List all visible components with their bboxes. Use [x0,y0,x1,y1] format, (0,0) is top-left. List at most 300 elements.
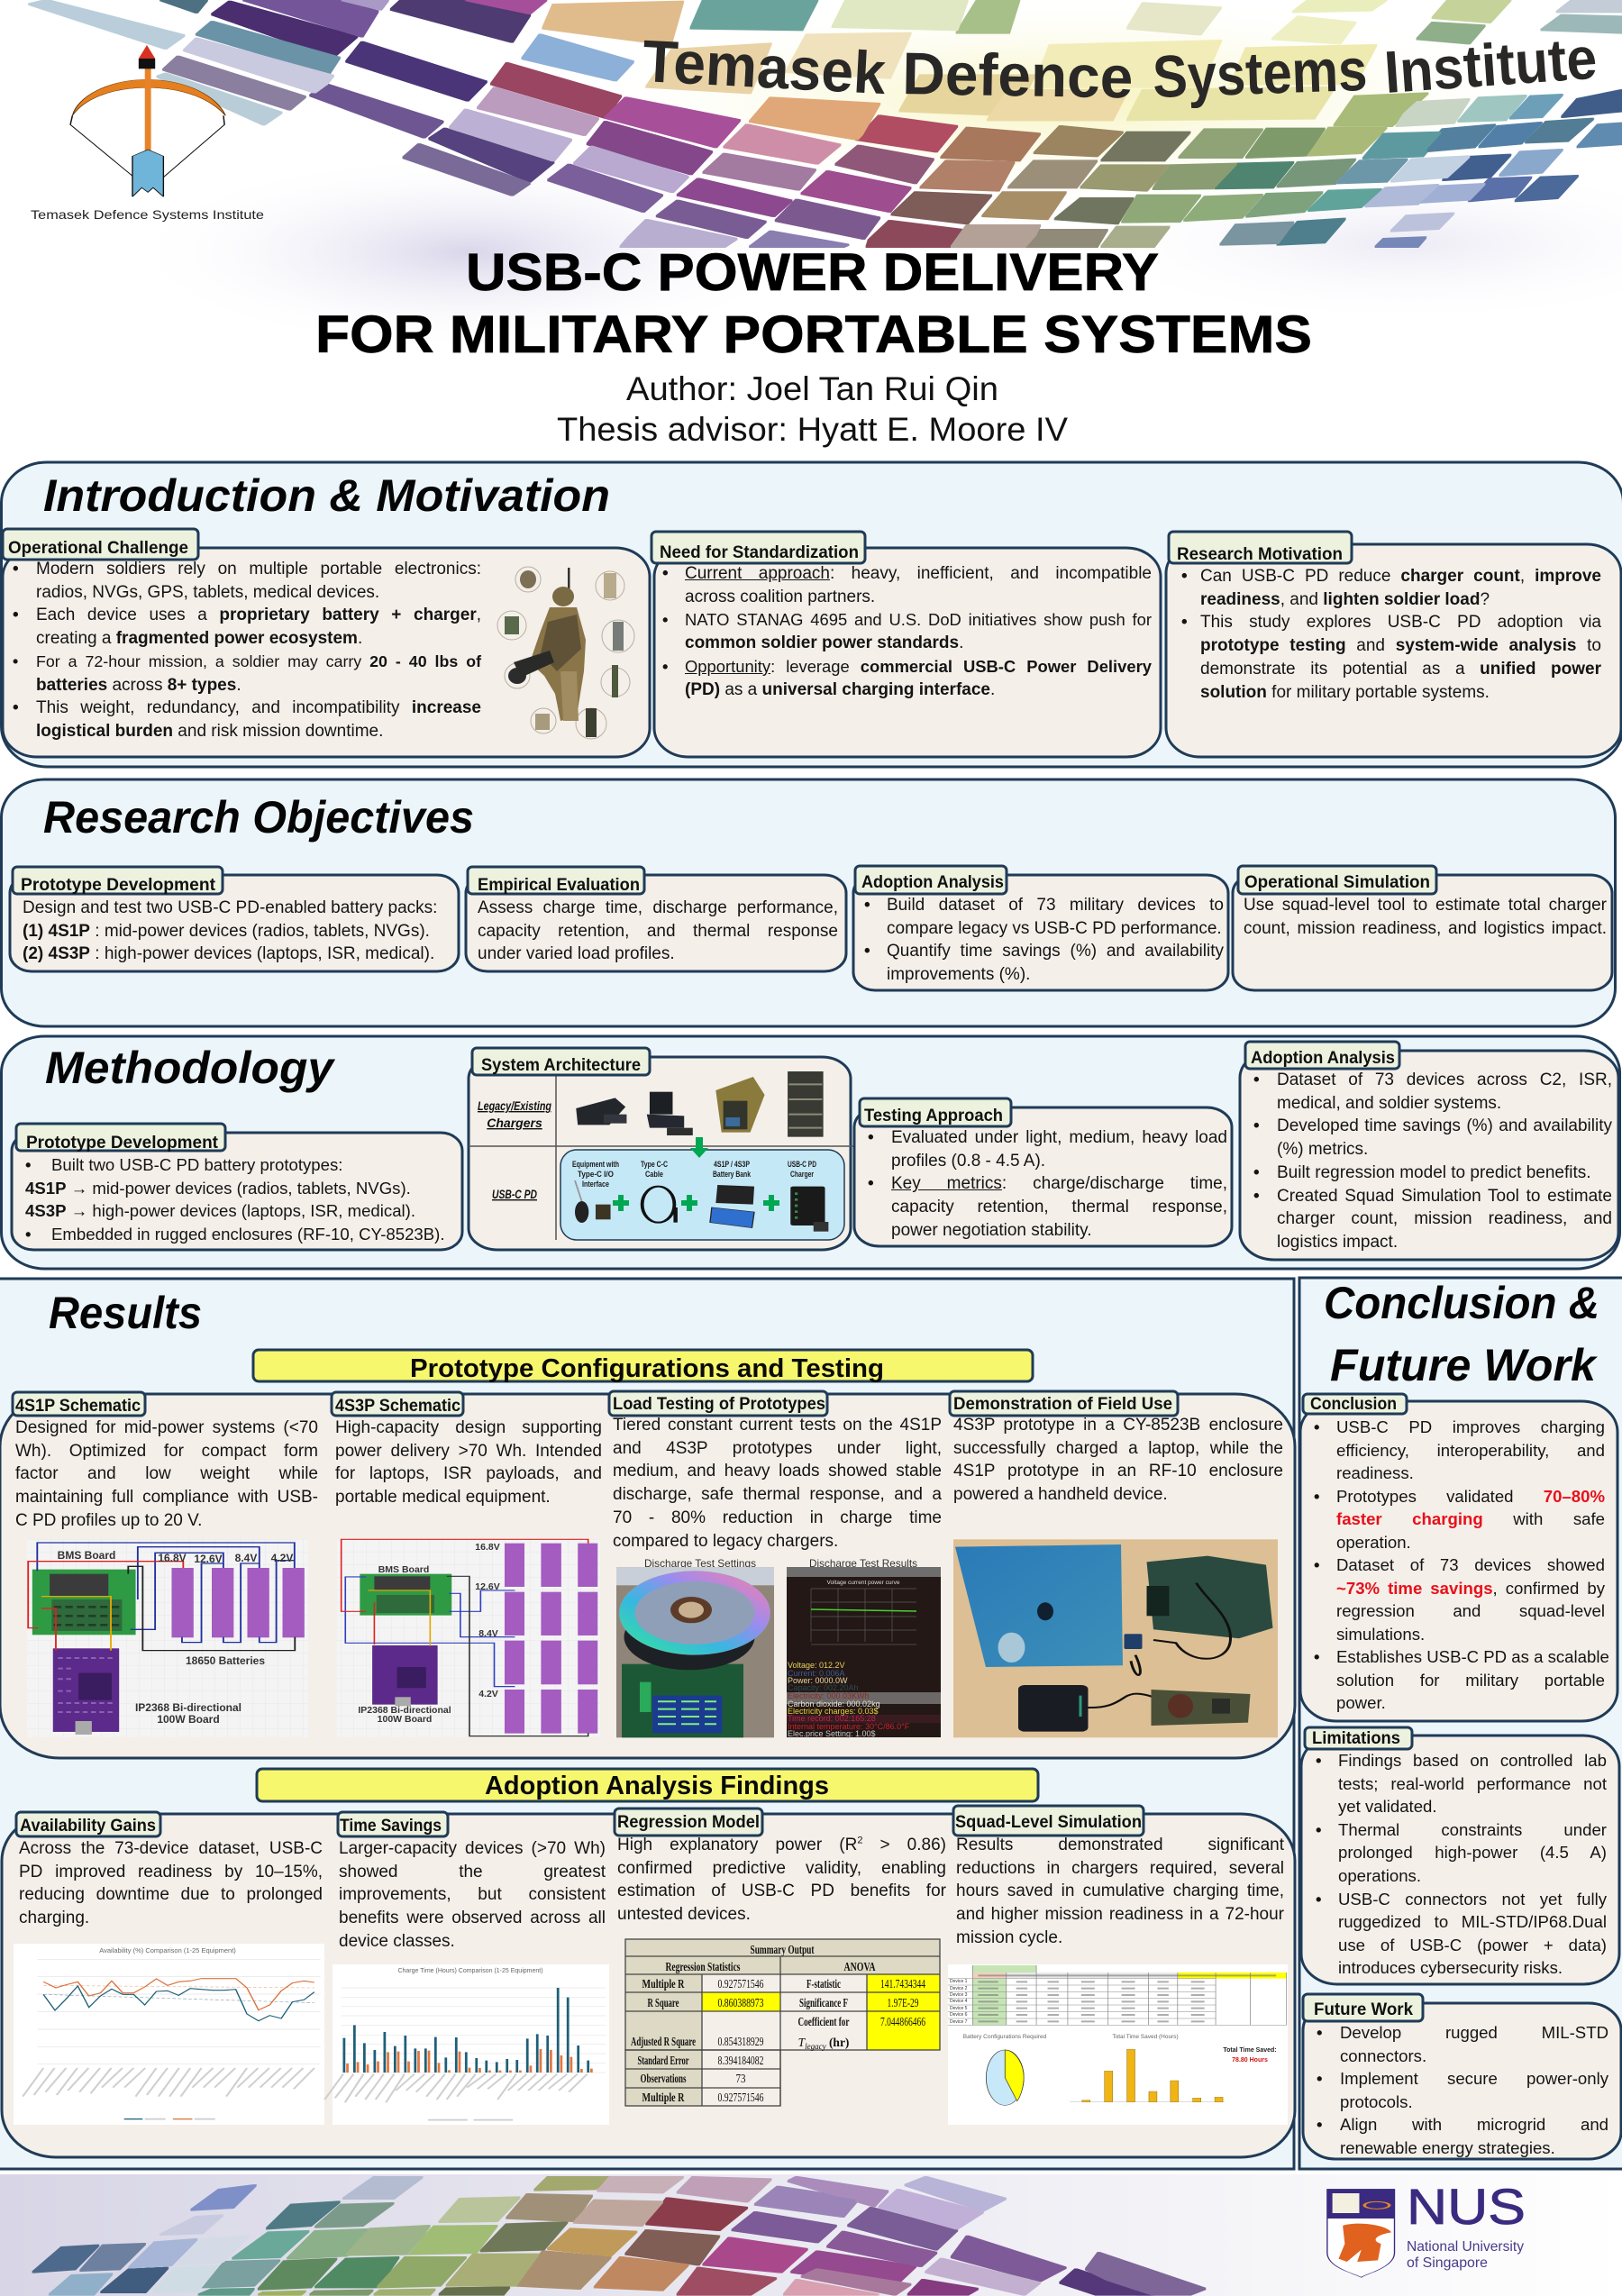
text: conclusion bullets: Establishes USB-C PD as a scalable [1336,1647,1609,1666]
heading: Results: Results [49,1288,202,1338]
mosaic: header colour tiles [29,0,1622,247]
table: regression summary output: Adjusted R Square [631,2035,696,2048]
text: adoption analysis bullets [1277,1069,1612,1254]
text: squad-level simulation: and higher mission readiness in a 72-hour [956,1905,1284,1924]
text: adoption analysis bullets: Developed time savings (%) and availability [1277,1116,1612,1135]
table: regression summary output: Standard Error [638,2054,688,2067]
text: 4S1P schematic description: Wh). Optimized for compact form [15,1442,318,1461]
image: discharge test results screen [787,1567,941,1738]
panel: Conclusion & Future Work [1299,1278,1622,2169]
icon: TDSI bow and arrow logo [70,45,225,196]
text: testing approach bullets: power negotiation stability. [891,1221,1092,1240]
tab: 4S1P Schematic: 4S1P Schematic [15,1396,141,1416]
text: empirical evaluation [478,897,838,967]
text: conclusion bullets: simulations. [1336,1624,1425,1644]
table: regression summary output: 0.927571546 [717,2091,764,2104]
tab: Operational Simulation: Operational Simulation [1244,872,1430,892]
text: adoption analysis objective [887,894,1224,988]
card: Testing Approach: • [868,1174,874,1193]
institute name: Temasek [641,27,888,106]
footer banner with mosaic and NUS logo [0,2174,1622,2296]
text: 4S1P schematic description: Designed for mid-power systems (<70 [15,1418,318,1437]
chart: availability comparison line chart: Availability (%) Comparison (1-25 Equipment) [99,1946,236,1954]
table: regression summary output: 8.394184082 [717,2054,764,2067]
image: squad simulation tool sheet: Total Time Saved (Hours) [1112,2034,1179,2040]
card: Conclusion: • [1314,1647,1320,1666]
tab: Squad-Level Simulation [953,1806,1144,1836]
image: squad simulation tool sheet: Device 3 [950,1992,968,1998]
text: operational challenge bullets: This weight, redundancy, and incompatibility increase [36,698,481,717]
text: empirical evaluation: capacity retention, and thermal response [478,922,838,941]
tab: Need for Standardization: Need for Standardization [660,542,859,562]
tab: Operational Simulation [1238,866,1436,894]
diagram: 4S1P schematic [27,1539,308,1737]
text: load testing description: Tiered constant current tests on the 4S1P [613,1416,942,1435]
card: Need for Standardization: • [662,657,668,676]
card: Conclusion: • [1314,1555,1320,1574]
table: regression summary output: 73 [735,2072,746,2085]
card: Prototype Development method [12,1124,462,1250]
diagram: 4S3P schematic: 8.4V [478,1628,498,1639]
card: Operational Challenge: • [13,698,19,717]
image: squad simulation tool sheet: 78.80 Hours [1232,2057,1268,2064]
card: Adoption Analysis objective [853,866,1228,990]
text: load testing description: medium, and heavy loads showed stable [613,1462,942,1481]
tab: Research Motivation: Research Motivation [1177,544,1343,564]
image: squad simulation tool sheet: Total Time Saved: [1223,2047,1277,2054]
card: Need for Standardization: • [662,564,669,583]
diagram: 4S1P schematic: BMS Board [58,1549,115,1562]
text: limitations bullets: Thermal constraints under [1338,1820,1607,1839]
text: regression model: confirmed predictive validity, enabling [617,1859,946,1878]
banner: Adoption Analysis Findings [257,1769,1038,1801]
chart: charge time comparison bar chart: Charge Time (Hours) Comparison (1-25 Equipment) [397,1968,543,1974]
text: field use description: successfully charged a laptop, while the [953,1439,1283,1458]
card: Limitations: • [1316,1890,1322,1909]
title: USB-C POWER DELIVERY [466,243,1159,302]
text: conclusion bullets: Prototypes validated 70–80% [1336,1487,1605,1505]
text: need for standardization bullets: common soldier power standards. [685,633,963,652]
text: operational simulation: Use squad-level tool to estimate total charger [1244,896,1607,915]
diagram: USB-C PD components: Cable [645,1170,663,1180]
text: limitations bullets: tests; real-world performance not [1338,1774,1607,1793]
text: regression model [617,1834,946,1927]
text: regression model: High explanatory power (R2 > 0.86) [617,1836,946,1854]
text: future work bullets: Align with microgrid and [1340,2115,1608,2134]
icon: NUS shield [1327,2189,1395,2277]
text: testing approach bullets: Evaluated under light, medium, heavy load [891,1128,1227,1147]
label: Discharge Test Settings: Discharge Test Settings [644,1557,756,1570]
label: legacy chargers row [478,1098,551,1130]
text: conclusion bullets: efficiency, interoperability, and [1336,1440,1605,1460]
text: 4S3P schematic description [335,1417,602,1510]
text: conclusion bullets: ~73% time savings, confirmed by [1336,1579,1605,1597]
card: Future Work: • [1317,2023,1323,2042]
card: Limitations [1301,1727,1619,1984]
diagram: 4S3P schematic: 16.8V [475,1542,500,1553]
card: Adoption Analysis method: • [1253,1071,1260,1089]
card: Adoption Analysis method: • [1253,1116,1260,1135]
text: availability gains: PD improved readiness by 10–15%, [19,1863,323,1881]
logo: NUS wordmark: NUS [1407,2178,1526,2235]
text: adoption analysis bullets: medical, and soldier systems. [1277,1094,1501,1113]
diagram: USB-C PD components: Interface [582,1180,609,1189]
text: prototype method [25,1153,458,1247]
image: discharge test results screen: Carbon dioxide: 000.02kg [788,1699,880,1708]
card: Conclusion: • [1314,1487,1320,1505]
card: Adoption Analysis objective: • [864,896,870,915]
table: regression summary output: Significance F [799,1996,848,2009]
image: soldier with portable electronics [497,567,634,739]
text: operational simulation [1244,894,1607,941]
text: adoption analysis bullets: charger count, mission readiness, and [1277,1209,1612,1228]
card: adoption findings [2,1806,1295,2157]
diagram: 4S1P schematic: IP2368 Bi-directional [135,1701,241,1714]
tab: System Architecture: System Architecture [481,1055,641,1075]
table: regression summary output: 0.927571546 [717,1977,764,1991]
text: testing approach bullets: Key metrics: charge/discharge time, [891,1174,1227,1193]
text: regression model: untested devices. [617,1905,751,1924]
card: Conclusion [1300,1394,1617,1721]
image: squad simulation tool sheet [948,1964,1288,2125]
logo: NUS wordmark: of Singapore [1407,2255,1488,2271]
table: regression summary output: Regression Statistics [665,1960,741,1973]
tab: Limitations: Limitations [1312,1728,1400,1748]
card: Future Work: • [1317,2115,1323,2134]
text: load testing description: discharge, safe thermal response, and a [613,1485,942,1504]
table: regression summary output: Summary Output [750,1943,815,1956]
author and advisor [557,370,1068,448]
table: regression summary output [625,1939,940,2106]
diagram: 4S1P schematic: 4.2V [271,1552,293,1564]
table: regression summary output: Observations [640,2072,687,2085]
diagram: 4S1P schematic: 8.4V [235,1552,257,1564]
tab: Prototype Development: Prototype Development [21,875,215,895]
image: field demonstration photo [953,1539,1278,1737]
tab: Demonstration of Field Use: Demonstration of Field Use [953,1394,1172,1414]
card: Need for Standardization: • [662,610,668,629]
title [315,243,1312,364]
tab: Adoption Analysis [1245,1042,1399,1069]
text: squad-level simulation: Results demonstrated significant [956,1836,1284,1854]
text: 4S1P schematic description [15,1417,318,1534]
text: time savings [339,1837,606,1954]
tab: Prototype Development [16,1124,225,1153]
text: testing approach bullets: capacity retention, thermal response, [891,1198,1227,1216]
table: regression summary output: 0.860388973 [717,1996,764,2009]
text: research motivation bullets: solution for military portable systems. [1200,683,1490,702]
text: load testing description: compared to legacy chargers. [613,1532,838,1551]
diagram: 4S1P schematic: 12.6V [194,1553,223,1565]
text: load testing description [613,1414,942,1554]
text: future work bullets: Implement secure power-only [1340,2069,1608,2088]
table: regression summary output: 141.7434344 [880,1977,925,1991]
image: discharge test results screen: Voltage: 012.2V [788,1661,845,1670]
text: availability gains: charging. [19,1909,89,1927]
image: discharge test results screen: Voltage current power curve [827,1580,900,1586]
image: discharge test results screen: Elec.price Setting: 1.00$ [788,1729,876,1738]
text: availability gains: reducing downtime due to prolonged [19,1885,323,1904]
text: future work bullets: renewable energy strategies. [1340,2137,1555,2157]
text: time savings: improvements, but consistent [339,1885,606,1904]
text: operational challenge bullets: creating a fragmented power ecosystem. [36,629,362,648]
table: regression summary output: 1.97E-29 [887,1996,919,2009]
text: research motivation bullets: Can USB-C PD reduce charger count, improve [1200,567,1601,586]
table: regression summary output: (hr) [826,2036,849,2049]
diagram: USB-C PD components: Equipment with [572,1160,619,1170]
text: squad-level simulation: mission cycle. [956,1928,1062,1947]
tab: Squad-Level Simulation: Squad-Level Simulation [955,1812,1142,1832]
text: limitations bullets [1338,1749,1607,1982]
text: squad-level simulation: reductions in chargers required, several [956,1859,1284,1878]
diagram: 4S3P schematic: 12.6V [475,1581,500,1592]
tab: Empirical Evaluation [468,867,644,895]
text: load testing description: 70 - 80% reduction in charge time [613,1508,942,1527]
text: limitations bullets: ruggedized to MIL-STD/IP68.Dual [1338,1912,1607,1931]
image: squad simulation tool sheet: Device 1 [950,1979,968,1984]
image: discharge test results screen: Electricity: 000.03KWh [788,1691,870,1700]
text: conclusion bullets: USB-C PD improves charging [1336,1417,1605,1436]
text: research motivation bullets [1200,565,1601,706]
text: adoption analysis objective: Quantify time savings (%) and availability [887,942,1224,961]
tab: Research Motivation [1169,532,1352,564]
text: adoption analysis objective: improvements (%). [887,965,1030,984]
tab: Availability Gains: Availability Gains [20,1816,156,1836]
diagram: USB-C PD components: Type C-C [641,1160,668,1170]
text: time savings: benefits were observed across all [339,1909,606,1927]
card: Operational Challenge: • [13,606,19,624]
tab: Regression Model: Regression Model [617,1812,760,1832]
text: prototype objective: (2) 4S3P : high-power devices (laptops, ISR, medical). [23,944,434,963]
banner: Adoption Analysis Findings: Adoption Analysis Findings [485,1772,829,1800]
text: squad-level simulation: hours saved in cumulative charging time, [956,1881,1284,1900]
tab: Time Savings: Time Savings [340,1816,442,1836]
chart: charge time comparison bar chart [324,1964,609,2125]
tab: Empirical Evaluation: Empirical Evaluation [478,875,640,895]
author and advisor: Author: Joel Tan Rui Qin [626,370,998,407]
text: operational challenge bullets: Modern soldiers rely on multiple portable electronics: [36,560,481,579]
image: discharge test results screen: Current: 0.006A [788,1669,845,1678]
arrow: legacy to USB-C PD [690,1137,708,1158]
institute name: Defence [902,40,1134,110]
text: time savings: showed the greatest [339,1863,606,1881]
diagram: 4S3P schematic: 4.2V [478,1689,498,1699]
text: research motivation bullets: readiness, and lighten soldier load? [1200,590,1490,609]
text: 4S3P schematic description: for laptops, ISR payloads, and [335,1464,602,1483]
tab: System Architecture [472,1048,650,1075]
text: 4S1P schematic description: maintaining full compliance with USB- [15,1488,318,1507]
text: 4S3P schematic description: power delivery >70 Wh. Intended [335,1442,602,1461]
image: squad simulation tool sheet: Device 7 [950,2019,968,2025]
text: future work bullets [1340,2021,1608,2162]
text: 4S3P schematic description: portable medical equipment. [335,1488,551,1507]
table: regression summary output: ANOVA [843,1960,876,1973]
table: regression summary output: Coefficient for [798,2015,849,2028]
table: regression summary output: Multiple R [642,1977,685,1991]
diagram: 4S3P schematic: BMS Board [378,1564,429,1575]
card: Need for Standardization [652,532,1161,757]
tab: Operational Challenge: Operational Challenge [8,538,188,558]
panel: Introduction & Motivation [2,462,1622,767]
tab: Testing Approach: Testing Approach [864,1106,1003,1125]
text: adoption analysis bullets: Dataset of 73 devices across C2, ISR, [1277,1071,1612,1089]
card: Adoption Analysis objective: • [864,942,870,961]
text: field use description [953,1414,1283,1508]
text: need for standardization bullets: Opportunity: leverage commercial USB-C Power Delivery [685,657,1152,676]
table: regression summary output: 0.854318929 [717,2035,764,2048]
text: availability gains [19,1837,323,1931]
image: discharge test results screen: Time record: 002:165:28 [788,1714,876,1723]
text: need for standardization bullets: NATO STANAG 4695 and U.S. DoD initiatives show push for [685,610,1152,629]
card: Operational Challenge: • [13,560,19,579]
diagram: 4S3P schematic [337,1539,600,1737]
panel: Results [0,1279,1295,2169]
text: limitations bullets: Findings based on controlled lab [1338,1751,1607,1770]
heading: Conclusion & Future Work [1324,1278,1599,1390]
text: operational challenge bullets: Each device uses a proprietary battery + charger, [36,606,481,624]
card: Testing Approach: • [868,1128,874,1147]
diagram: USB-C PD components: USB-C PD [788,1160,816,1170]
card: Operational Challenge [3,529,650,757]
diagram: USB-C PD components: Charger [790,1170,814,1180]
text: conclusion bullets: faster charging with safe [1336,1509,1605,1528]
card: Limitations: • [1316,1751,1322,1770]
tab: Future Work: Future Work [1314,2000,1413,2019]
text: testing approach bullets [891,1126,1227,1244]
tab: Load Testing of Prototypes: Load Testing of Prototypes [613,1394,825,1414]
logo: NUS wordmark: National University [1407,2239,1524,2255]
text: prototype objective: (1) 4S1P : mid-power devices (radios, tablets, NVGs). [23,922,430,941]
tab: Prototype Development: Prototype Development [26,1133,218,1153]
tab: Prototype Development [13,867,223,895]
image: squad simulation tool sheet: Device 2 [950,1986,968,1991]
card: Future Work: • [1317,2069,1323,2088]
text: time savings: device classes. [339,1932,455,1951]
tab: Testing Approach [860,1098,1011,1126]
text: prototype objective [23,897,446,967]
card: Operational Simulation [1233,866,1612,990]
text: operational challenge bullets: logistical burden and risk mission downtime. [36,722,383,741]
card: Adoption Analysis method [1240,1042,1618,1260]
text: time savings: Larger-capacity devices (>70 Wh) [339,1839,606,1858]
text: conclusion bullets: regression and squad-level [1336,1601,1605,1620]
tab: Operational Challenge [3,529,198,560]
text: field use description: 4S1P prototype in an RF-10 enclosure [953,1462,1283,1481]
text: adoption analysis bullets: (%) metrics. [1277,1140,1368,1159]
title: FOR MILITARY PORTABLE SYSTEMS [315,305,1312,364]
text: prototype method: Built two USB-C PD battery prototypes: [51,1155,342,1174]
table: regression summary output: F-statistic [806,1977,841,1991]
image: squad simulation tool sheet: Battery Configurations Required [963,2034,1047,2040]
panel: Research Objectives [2,779,1615,1026]
text: operational simulation: count, mission readiness, and logistics impact. [1244,919,1607,938]
card: Adoption Analysis method: • [1253,1187,1260,1206]
text: prototype method: • [25,1155,32,1174]
card: Research Motivation: • [1181,613,1188,632]
text: future work bullets: Develop rugged MIL-STD [1340,2023,1608,2042]
text: conclusion bullets: readiness. [1336,1463,1414,1482]
text: prototype objective: Design and test two USB-C PD-enabled battery packs: [23,898,437,917]
image: discharge test results screen: Power: 0000.0W [788,1676,848,1685]
text: operational challenge bullets [36,558,481,745]
image: load tester with fan [616,1567,774,1737]
diagram: USB-C PD components: 4S1P / 4S3P [714,1160,750,1170]
text: need for standardization bullets: across coalition partners. [685,588,875,606]
chart: availability comparison line chart [14,1944,324,2125]
diagram: 4S1P schematic: 18650 Batteries [186,1654,265,1667]
text: conclusion bullets: Dataset of 73 devices showed [1336,1555,1605,1574]
heading: Research Objectives: Research Objectives [43,792,474,843]
text: testing approach bullets: profiles (0.8 - 4.5 A). [891,1152,1045,1171]
label: legacy chargers row: Chargers [487,1116,542,1130]
text: research motivation bullets: demonstrate its potential as a unified power [1200,660,1601,679]
card: Research Motivation: • [1181,567,1188,586]
card: Future Work [1303,1994,1621,2162]
image: squad simulation tool sheet: Device 5 [950,2006,968,2011]
text: future work bullets: protocols. [1340,2092,1413,2110]
image: squad simulation tool sheet: Device 4 [950,1999,968,2004]
text: empirical evaluation: under varied load profiles. [478,944,675,963]
tab: Adoption Analysis: Adoption Analysis [861,872,1004,892]
text: adoption analysis objective: compare legacy vs USB-C PD performance. [887,919,1222,938]
image: legacy chargers [576,1071,824,1137]
card: System Architecture [469,1048,859,1250]
diagram: 4S3P schematic: IP2368 Bi-directional [358,1705,451,1716]
text: operational challenge bullets: radios, NVGs, GPS, tablets, medical devices. [36,583,379,602]
header banner with mosaic and institute name [0,0,1622,351]
icon: green plus signs [613,1195,779,1211]
text: load testing description: and 4S3P prototypes under light, [613,1439,942,1458]
text: prototype method: 4S1P → mid-power devices (radios, tablets, NVGs). [25,1179,411,1198]
text: limitations bullets: prolonged high-power (4.5 A) [1338,1843,1607,1862]
text: operational challenge bullets: For a 72-hour mission, a soldier may carry 20 - 40 lbs of [36,652,481,670]
card: Limitations: • [1316,1820,1322,1839]
label: Discharge Test Results: Discharge Test Results [809,1557,917,1570]
text: need for standardization bullets: (PD) as a universal charging interface. [685,680,995,699]
logo: NUS wordmark [1407,2178,1526,2271]
institute name: Institute [1382,24,1599,105]
text: limitations bullets: operations. [1338,1866,1421,1885]
heading: Conclusion & Future Work: Future Work [1330,1340,1598,1390]
text: limitations bullets: introduces cybersecurity risks. [1338,1958,1563,1977]
text: squad-level simulation [956,1834,1284,1951]
text: conclusion bullets [1336,1416,1605,1717]
card: Conclusion: • [1314,1417,1320,1436]
text: adoption analysis bullets: logistics impact. [1277,1233,1398,1252]
card: Empirical Evaluation [466,867,846,971]
diagram: USB-C PD components: Battery Bank [713,1170,752,1180]
table: regression summary output: legacy [805,2042,826,2051]
text: limitations bullets: yet validated. [1338,1797,1437,1816]
table: regression summary output: 7.044866466 [880,2015,925,2028]
heading: Methodology: Methodology [45,1043,335,1093]
text: research motivation bullets: prototype testing and system-wide analysis to [1200,636,1601,655]
tab: Future Work [1303,1994,1423,2021]
card: Adoption Analysis method: • [1253,1163,1260,1182]
institute name: Systems [1152,36,1368,110]
tab: Adoption Analysis: Adoption Analysis [1251,1048,1395,1068]
text: adoption analysis objective: Build dataset of 73 military devices to [887,896,1224,915]
tab: 4S3P Schematic: 4S3P Schematic [335,1396,460,1416]
table: regression summary output: T [798,2036,805,2049]
heading: Conclusion & Future Work: Conclusion & [1324,1278,1599,1328]
text: operational challenge bullets: batteries across 8+ types. [36,676,241,695]
tab: Regression Model [615,1809,762,1836]
text: research motivation bullets: This study explores USB-C PD adoption via [1200,613,1601,632]
text: need for standardization bullets [685,562,1152,703]
diagram: 4S1P schematic: 100W Board [157,1713,220,1726]
image: discharge test results screen: Internal temperature: 30°C/86.0°F [788,1722,910,1731]
